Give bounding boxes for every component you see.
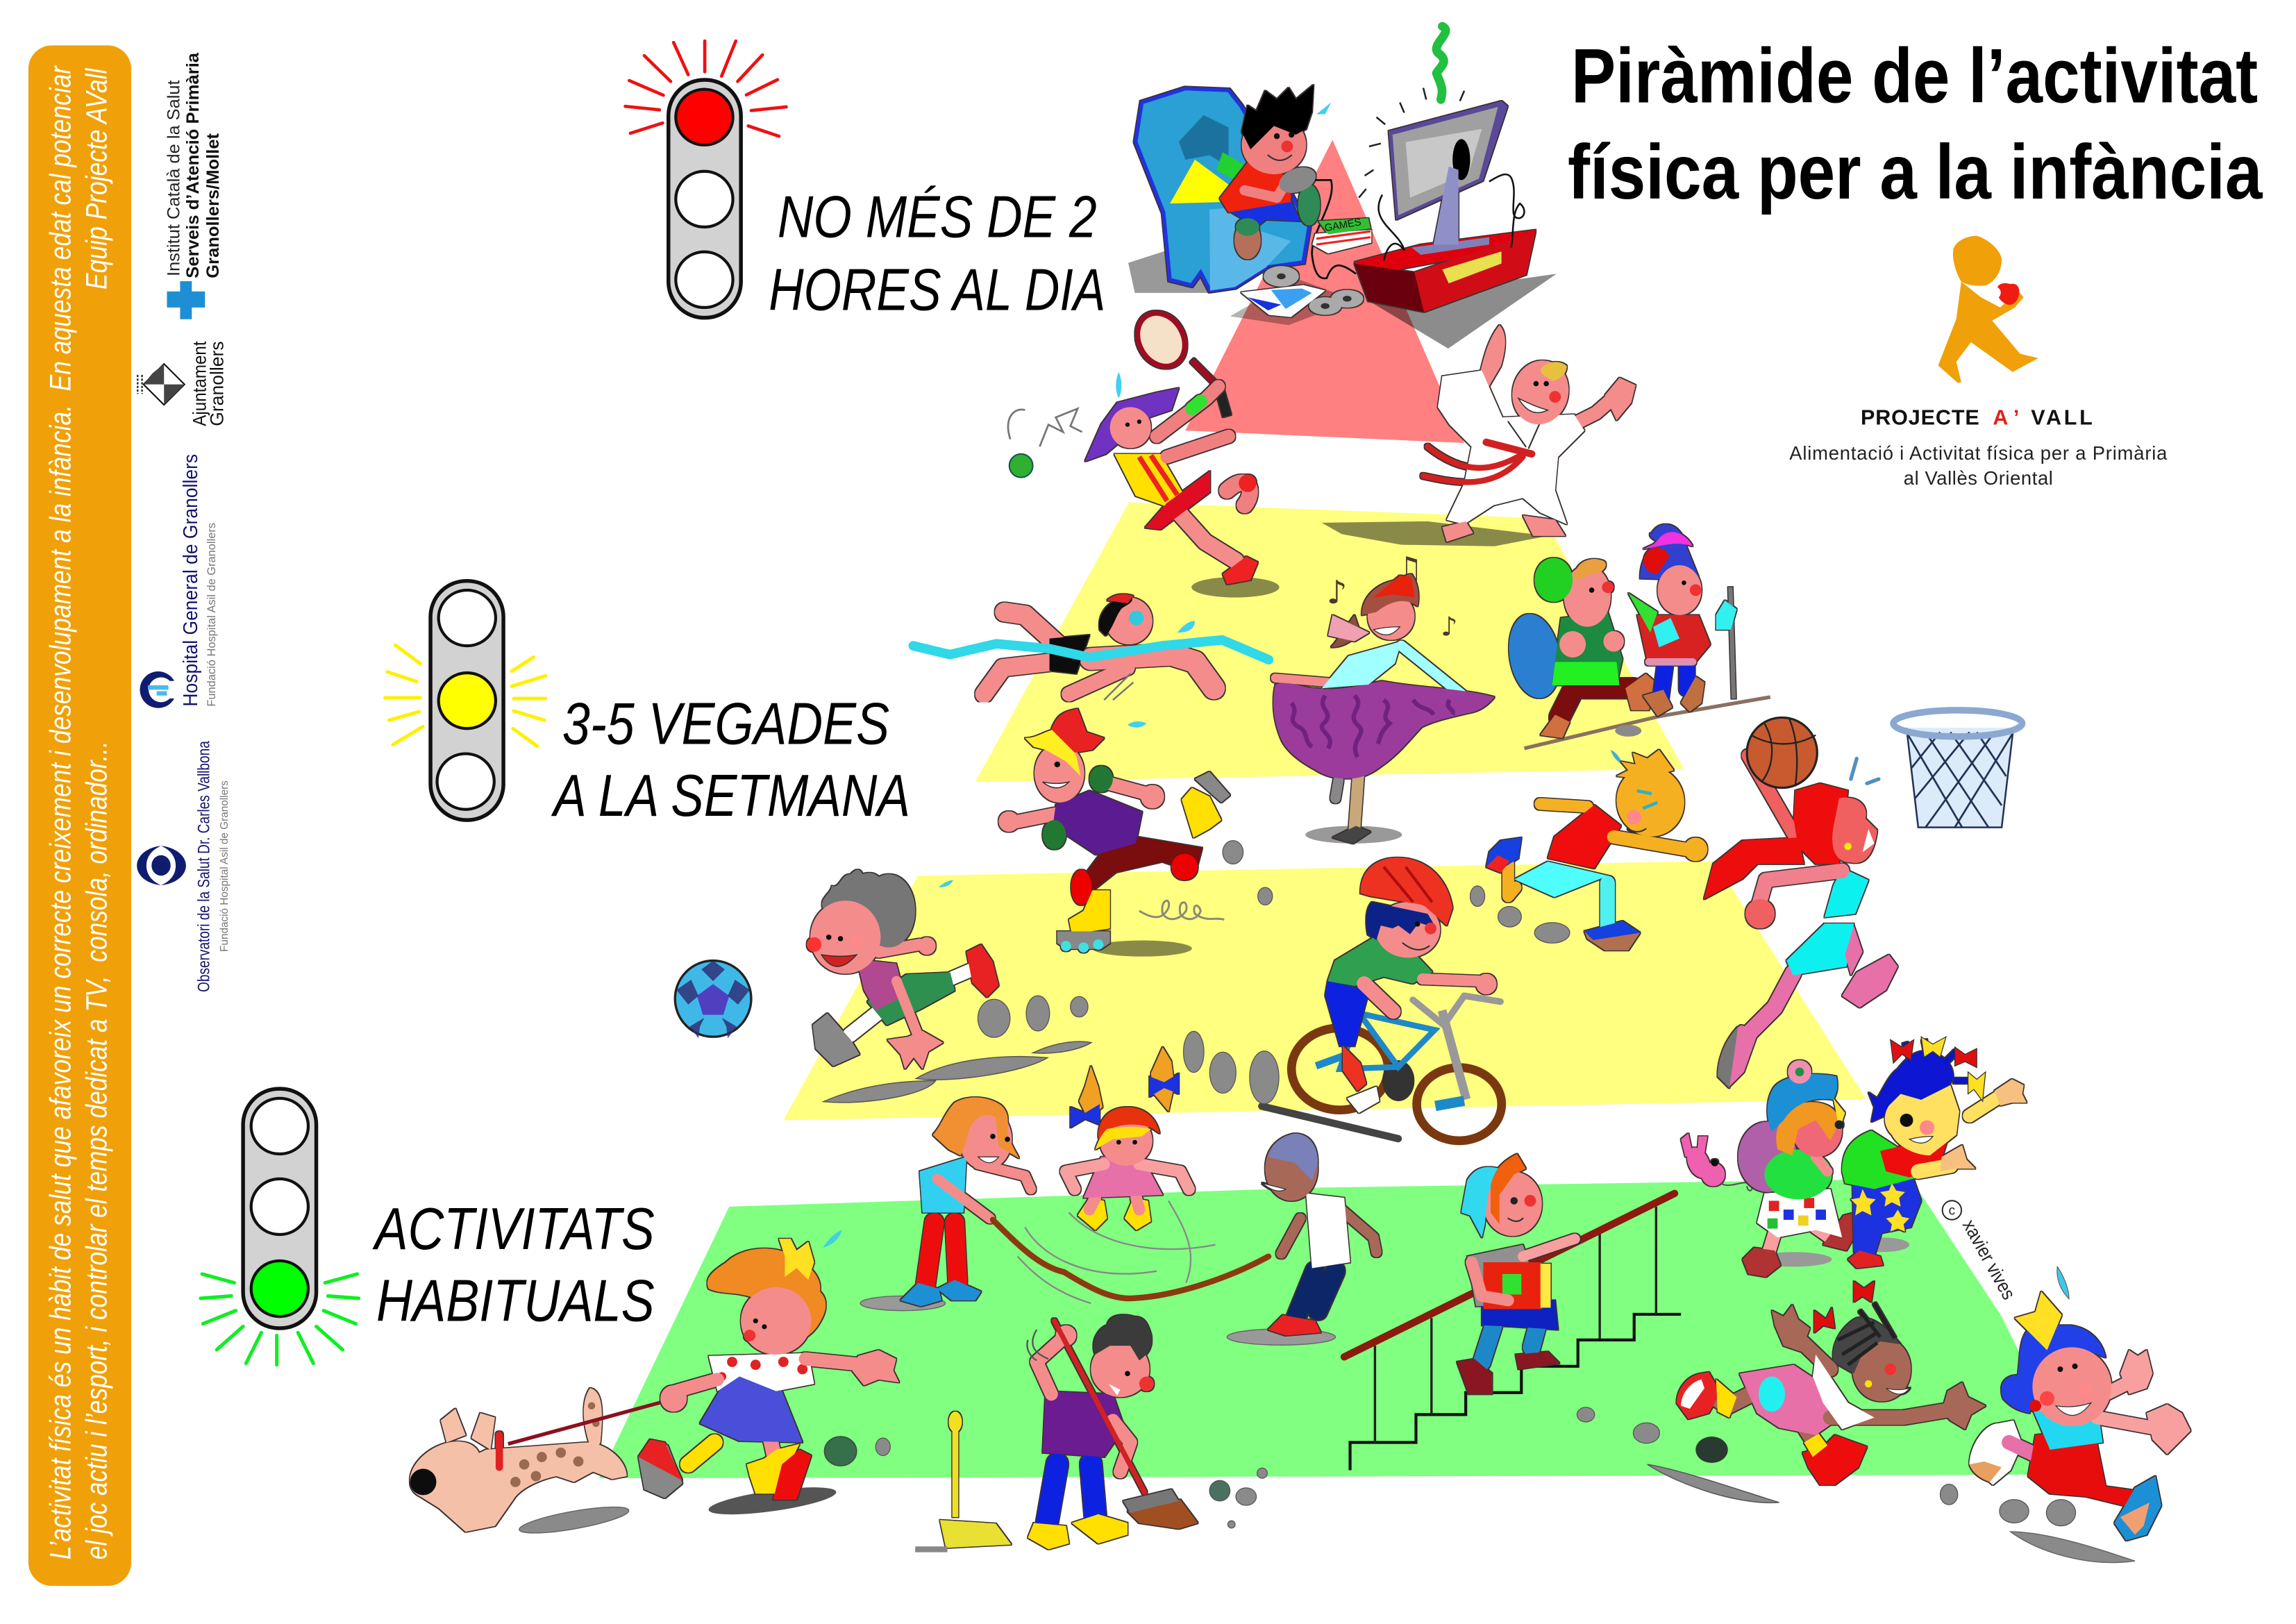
dustpan bbox=[940, 1412, 1012, 1548]
teddy bbox=[1681, 1133, 1725, 1186]
logo: Ajuntament de Granollers bbox=[137, 341, 228, 426]
jump rope bbox=[993, 1220, 1268, 1298]
illustration: girl dancing with music notes bbox=[1273, 550, 1495, 844]
label: activitats habituals: HABITUALS bbox=[376, 1268, 655, 1334]
label: activitats habituals bbox=[372, 1196, 655, 1334]
dog bbox=[400, 1388, 627, 1532]
music notes: ♪ bbox=[1441, 611, 1458, 642]
panel: pyramid top tier (red triangle) bbox=[1185, 140, 1464, 443]
logo subtitle: Alimentació i Activitat física per a Primària bbox=[1789, 442, 2168, 464]
sidebar text signature: Equip Projecte AVall bbox=[80, 67, 112, 290]
illustration: blue-haired girl running bbox=[1940, 1266, 2190, 1562]
illustration: girl with braids running bbox=[1577, 1281, 1986, 1502]
girl with yellow bow bbox=[639, 1239, 899, 1500]
illustration: girl playing tennis bbox=[1008, 305, 1280, 598]
tennis girl body bbox=[1085, 387, 1258, 585]
game boxes and discs bbox=[1241, 218, 1371, 317]
music notes bbox=[1327, 550, 1458, 642]
logo: Institut Català de la Salut bbox=[164, 52, 223, 319]
credit: xavier vives: xavier vives bbox=[1959, 1216, 2020, 1303]
bicycle bbox=[1291, 996, 1502, 1141]
illustration: boy going up the stairs bbox=[1344, 1154, 1681, 1471]
water surface bbox=[913, 640, 1268, 660]
logo: Ajuntament de Granollers: Granollers bbox=[207, 341, 228, 426]
panel: pyramid base tier (green) bbox=[599, 1179, 2079, 1478]
boy with gamepad bbox=[1220, 85, 1320, 259]
credit: xavier vives: c bbox=[1949, 1204, 1955, 1219]
illustration: runner with red shirt bbox=[1470, 750, 1707, 951]
label: 3-5 vegades a la setmana: A LA SETMANA bbox=[551, 763, 910, 829]
lead bbox=[508, 1388, 703, 1444]
logo: Institut Català de la Salut: Granollers/Mollet bbox=[203, 133, 223, 278]
logo: Observatori de la Salut: Fundació Hospital Asil de Granollers bbox=[219, 780, 231, 952]
credit: xavier vives bbox=[1943, 1200, 2020, 1303]
boy holding rope bbox=[1262, 1133, 1377, 1336]
logo: Hospital General de Granollers: Hospital General de Granollers bbox=[180, 454, 202, 707]
illustration: children jumping rope bbox=[860, 1047, 1377, 1345]
logo: Observatori de la Salut: Observatori de la Salut Dr. Carles Vallbona bbox=[195, 741, 214, 992]
sweeping boy bbox=[1028, 1315, 1198, 1549]
logo: Institut Català de la Salut: Serveis d’Atenció Primària bbox=[183, 52, 203, 278]
logo wordmark: Projecte A'Vall bbox=[1861, 406, 2093, 430]
smoke squiggle over TV bbox=[1436, 26, 1446, 99]
basketball hoop bbox=[1893, 710, 2022, 828]
illustration: boy on inline skates bbox=[998, 709, 1273, 957]
label: no més de 2 hores al dia: NO MÉS DE 2 bbox=[778, 185, 1097, 251]
staircase bbox=[1344, 1194, 1681, 1471]
hair bows bbox=[1891, 1037, 1986, 1101]
music notes: ♪ bbox=[1327, 574, 1347, 611]
illustration: boy sweeping with broom and dustpan bbox=[915, 1315, 1267, 1552]
traffic light: red, no more than 2 hours bbox=[626, 41, 787, 318]
basketball bbox=[1747, 717, 1817, 788]
illustration: child swimming bbox=[913, 594, 1268, 700]
logo subtitle bbox=[1789, 442, 2168, 489]
sidebar: orange message bar bbox=[28, 45, 131, 1586]
label: 3-5 vegades a la setmana bbox=[551, 691, 910, 829]
logo: Ajuntament de Granollers: Ajuntament bbox=[190, 341, 210, 426]
logo subtitle: al Vallès Oriental bbox=[1904, 467, 2053, 489]
tennis racket bbox=[1128, 305, 1227, 416]
illustration: boy with star trousers and bows bbox=[1842, 1037, 2027, 1268]
music notes: ♫ bbox=[1394, 550, 1423, 587]
hiker with walking stick bbox=[1628, 524, 1736, 716]
illustration: two children hiking bbox=[1502, 524, 1770, 748]
illustration: boy doing karate bbox=[1322, 325, 1636, 546]
illustration: girl walking a dog bbox=[400, 1230, 899, 1539]
illustration: girl playing basketball bbox=[1704, 710, 2022, 1088]
ground shadows bbox=[823, 1041, 1091, 1103]
label: activitats habituals: ACTIVITATS bbox=[372, 1196, 655, 1262]
logo wordmark: Projecte A'Vall: A’ bbox=[1993, 406, 2019, 430]
logo wordmark: Projecte A'Vall: VALL bbox=[2031, 406, 2093, 430]
logo: Projecte AVall figure with apple bbox=[1938, 236, 2038, 383]
icon: football bbox=[675, 961, 751, 1038]
logo: Hospital General de Granollers: Fundació Hospital Asil de Granollers bbox=[205, 523, 218, 707]
illustration: child riding a bicycle bbox=[1184, 857, 1502, 1141]
cyclist bbox=[1325, 857, 1496, 1113]
label: no més de 2 hores al dia: HORES AL DIA bbox=[769, 257, 1105, 323]
traffic light: green, everyday activities bbox=[201, 1089, 359, 1365]
logo: Institut Català de la Salut: Institut Català de la Salut bbox=[164, 80, 183, 276]
label: no més de 2 hores al dia bbox=[769, 185, 1105, 323]
illustration: child playing video games bbox=[1128, 26, 1557, 349]
sidebar text line 2: el joc actiu i l’esport, i controlar el temps dedicat a TV, consola, ordinador... bbox=[80, 741, 112, 1559]
armchair bbox=[1136, 89, 1309, 290]
illustration: child running after a football bbox=[807, 870, 1091, 1103]
hiker with blue backpack bbox=[1502, 558, 1657, 738]
girl holding rope bbox=[900, 1098, 1031, 1306]
TV on a red cabinet bbox=[1355, 101, 1536, 312]
title bbox=[1568, 33, 2263, 215]
traffic light: yellow, 3-5 times a week bbox=[385, 581, 546, 820]
logo: Observatori de la Salut bbox=[137, 741, 231, 992]
logo: Hospital General de Granollers bbox=[140, 454, 218, 708]
logo wordmark: Projecte A'Vall: PROJECTE bbox=[1861, 406, 1979, 430]
label: 3-5 vegades a la setmana: 3-5 VEGADES bbox=[562, 691, 889, 757]
jumping girl bbox=[1066, 1047, 1189, 1230]
panel: pyramid second tier (yellow) bbox=[975, 502, 1684, 782]
illustration: girl with backpack and teddy bbox=[1681, 1060, 1858, 1277]
panel: pyramid third tier (yellow) bbox=[783, 861, 1866, 1120]
illustration: child playing video games: GAMES bbox=[1324, 217, 1362, 234]
